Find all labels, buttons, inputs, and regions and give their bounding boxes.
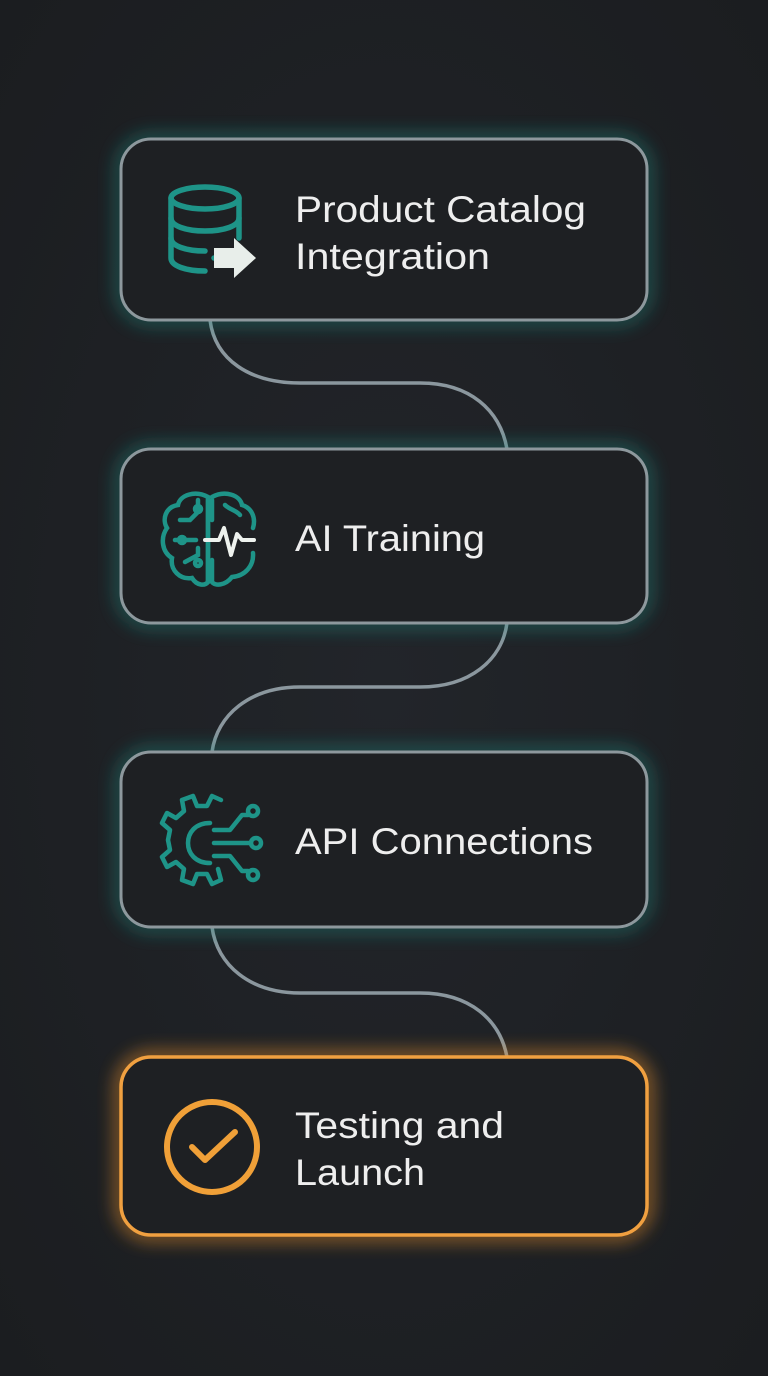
panel: testing and launch: [121, 1057, 647, 1235]
icon: brain with pulse: [163, 494, 254, 585]
connector 2: [212, 623, 507, 752]
connector 3: [212, 927, 507, 1057]
panel: API connections: [121, 752, 647, 927]
text: Product Catalog Integration: Product Catalog: [295, 189, 586, 230]
text: AI Training: AI Training: [295, 518, 485, 559]
text: API Connections: API Connections: [295, 821, 593, 862]
icon: check circle: [167, 1102, 257, 1192]
text: Testing and Launch: Testing and: [295, 1105, 504, 1146]
text: Testing and Launch: Launch: [295, 1152, 425, 1193]
text: Product Catalog Integration: Integration: [295, 236, 490, 277]
text: Testing and Launch: [295, 1105, 504, 1193]
panel: product catalog integration: [121, 139, 647, 320]
panel: AI training: [121, 449, 647, 623]
connector 1: [210, 320, 507, 449]
icon: database with arrow: [171, 187, 239, 271]
icon: gear with circuit: [162, 796, 261, 884]
text: Product Catalog Integration: [295, 189, 586, 277]
